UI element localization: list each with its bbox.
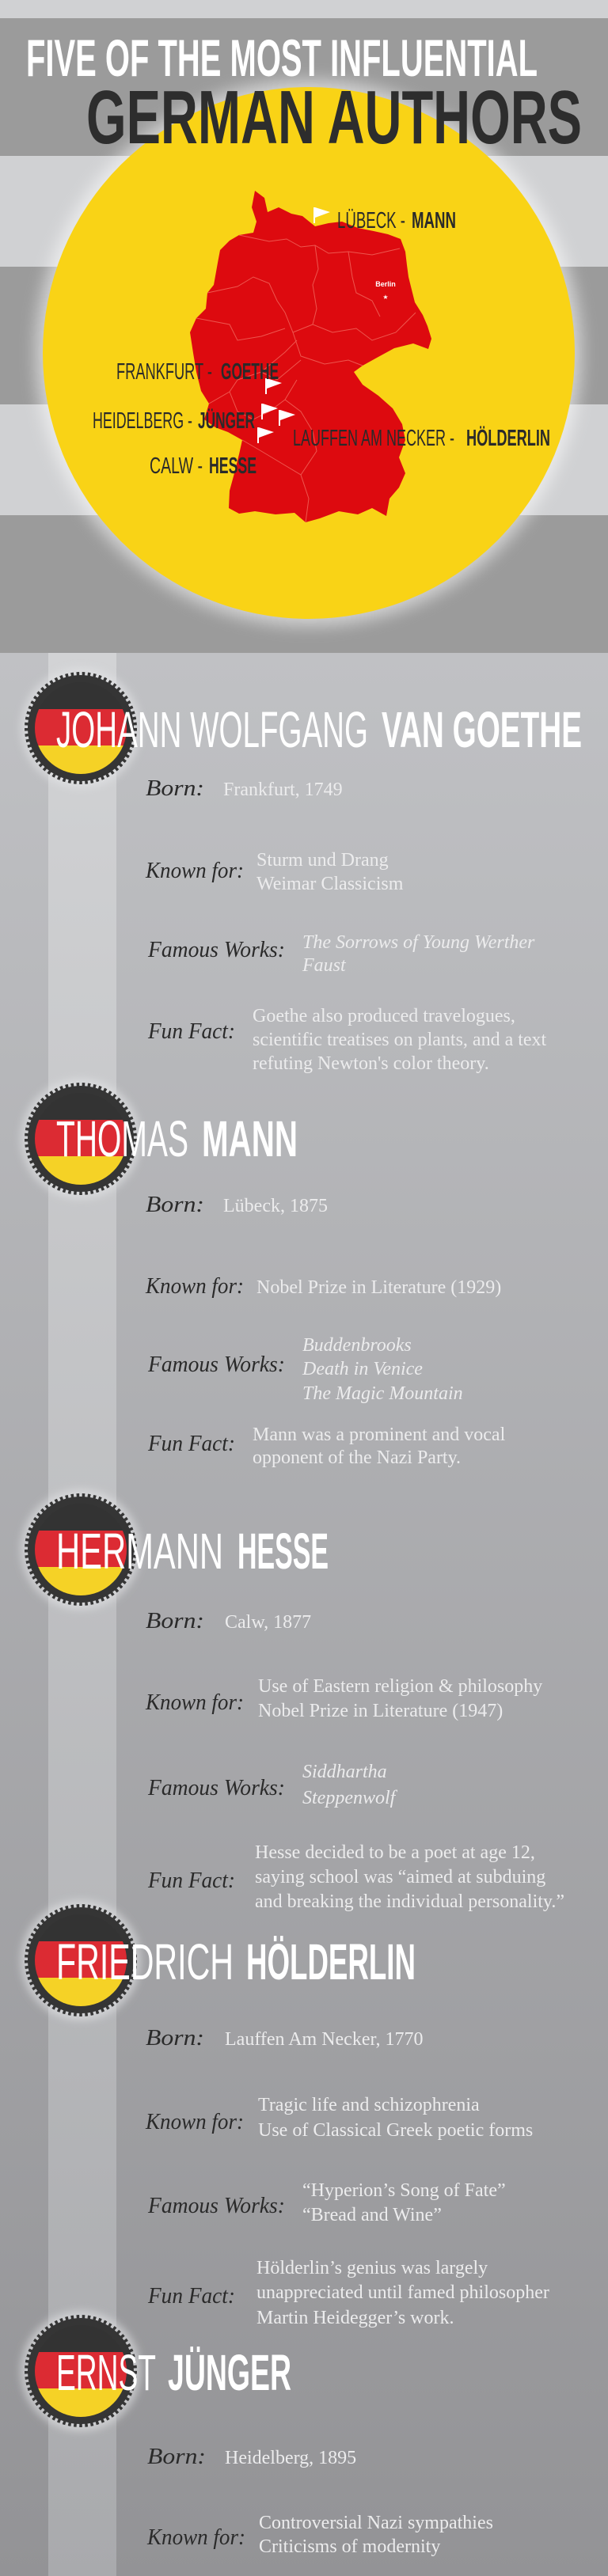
details: Goethe: Weimar Classicism: [256, 874, 404, 894]
name: Hesse: HESSE: [238, 1523, 329, 1580]
details: Hesse: Steppenwolf: [302, 1788, 398, 1808]
panel: Hölderlin: [21, 1900, 549, 2328]
map labels: MANN: [412, 208, 456, 233]
details: Hölderlin: [145, 2026, 549, 2328]
details: Hesse: Known for:: [145, 1690, 244, 1715]
details: Goethe: scientific treatises on plants, and a text: [253, 1030, 547, 1050]
details: Hölderlin: Lauffen Am Necker, 1770: [225, 2029, 424, 2050]
details: Hesse: Fun Fact:: [147, 1868, 235, 1893]
name: Jünger: JÜNGER: [168, 2344, 291, 2401]
map labels: HEIDELBERG -: [93, 408, 192, 434]
map labels: HÖLDERLIN: [466, 425, 550, 451]
details: Jünger: Known for:: [146, 2525, 245, 2550]
details: Hölderlin: Born:: [146, 2026, 204, 2051]
details: Goethe: Faust: [302, 955, 347, 976]
name: Goethe: JOHANN WOLFGANG: [56, 701, 368, 758]
details: Mann: opponent of the Nazi Party.: [253, 1447, 461, 1468]
details: Hesse: Nobel Prize in Literature (1947): [258, 1701, 503, 1721]
details: Mann: Known for:: [145, 1274, 244, 1299]
details: Hölderlin: Famous Works:: [147, 2194, 285, 2218]
details: Hölderlin: Martin Heidegger’s work.: [256, 2308, 454, 2328]
badge: Goethe: [21, 668, 141, 788]
map labels: JÜNGER: [198, 408, 255, 434]
details: Mann: [145, 1193, 506, 1468]
name: Jünger: ERNST: [56, 2344, 156, 2401]
map labels: FRANKFURT -: [116, 359, 212, 385]
name: Hesse: HERMANN: [56, 1523, 223, 1580]
details: Jünger: Criticisms of modernity: [259, 2536, 440, 2557]
details: Goethe: Famous Works:: [147, 938, 285, 962]
Berlin marker: ★: [382, 294, 389, 301]
details: Mann: Fun Fact:: [147, 1432, 235, 1456]
details: Hölderlin: unappreciated until famed philosopher: [256, 2282, 549, 2303]
details: Mann: The Magic Mountain: [302, 1383, 463, 1404]
Berlin marker: Berlin: [375, 280, 396, 288]
details: Goethe: Sturm und Drang: [256, 850, 389, 871]
map labels: HESSE: [209, 453, 256, 479]
details: Goethe: The Sorrows of Young Werther: [302, 932, 535, 953]
details: Hesse: Calw, 1877: [225, 1612, 311, 1633]
details: Hölderlin: “Hyperion’s Song of Fate”: [302, 2180, 506, 2201]
details: Hölderlin: Use of Classical Greek poetic forms: [258, 2120, 533, 2141]
map labels: LÜBECK -: [337, 208, 405, 233]
name: Hölderlin: FRIEDRICH: [56, 1933, 234, 1990]
map labels: GOETHE: [221, 359, 279, 385]
details: Goethe: [145, 776, 547, 1074]
details: Jünger: Born:: [147, 2445, 206, 2469]
details: Goethe: Frankfurt, 1749: [223, 780, 343, 800]
details: Goethe: Known for:: [145, 859, 244, 883]
details: Hesse: Famous Works:: [147, 1776, 285, 1800]
map of Germany: [190, 191, 431, 522]
details: Goethe: Born:: [146, 776, 204, 801]
details: Hesse: Born:: [146, 1609, 204, 1633]
details: Hesse: Hesse decided to be a poet at age 12,: [255, 1842, 535, 1863]
name: Hölderlin: HÖLDERLIN: [246, 1933, 416, 1990]
Berlin marker: [375, 280, 396, 301]
details: Goethe: Goethe also produced travelogues,: [253, 1006, 515, 1026]
details: Mann: Nobel Prize in Literature (1929): [256, 1277, 501, 1298]
details: Mann: Buddenbrooks: [302, 1335, 412, 1356]
badge: Hölderlin: [21, 1900, 141, 2020]
title: [26, 28, 582, 160]
badge: Mann: [21, 1079, 141, 1199]
yellow circle: [36, 80, 582, 626]
details: Hesse: Siddhartha: [302, 1762, 387, 1782]
badge: Hesse: [21, 1489, 141, 1610]
panel: Mann: [21, 1079, 506, 1468]
details: Goethe: Fun Fact:: [147, 1019, 235, 1044]
map labels: [93, 208, 550, 479]
details: Hölderlin: Known for:: [145, 2110, 244, 2134]
details: Hesse: Use of Eastern religion & philosophy: [258, 1676, 542, 1697]
name: Mann: MANN: [202, 1110, 298, 1167]
details: Hölderlin: Fun Fact:: [147, 2284, 235, 2309]
details: Mann: Death in Venice: [302, 1359, 423, 1379]
background: header bands: [0, 0, 608, 653]
details: Hölderlin: Tragic life and schizophrenia: [258, 2095, 480, 2115]
panel: Goethe: [21, 668, 582, 1074]
details: Jünger: Heidelberg, 1895: [225, 2448, 356, 2468]
flag markers: [257, 207, 330, 443]
details: Mann: Mann was a prominent and vocal: [253, 1425, 506, 1445]
details: Hölderlin: Hölderlin’s genius was largely: [256, 2258, 488, 2278]
details: Mann: Famous Works:: [147, 1352, 285, 1377]
panel: Jünger: [21, 2311, 493, 2557]
badge: Jünger: [21, 2311, 141, 2431]
details: Hesse: [145, 1609, 564, 1912]
background: author section: [0, 653, 608, 2576]
details: Hölderlin: “Bread and Wine”: [302, 2205, 442, 2225]
details: Mann: Lübeck, 1875: [223, 1196, 328, 1216]
details: Mann: Born:: [146, 1193, 204, 1217]
details: Jünger: [146, 2445, 493, 2557]
details: Goethe: refuting Newton's color theory.: [253, 1053, 489, 1074]
map labels: CALW -: [150, 453, 203, 479]
name: Mann: THOMAS: [56, 1110, 188, 1167]
details: Hesse: and breaking the individual personality.”: [255, 1891, 564, 1912]
details: Jünger: Controversial Nazi sympathies: [259, 2513, 493, 2533]
map labels: LAUFFEN AM NECKER -: [293, 426, 454, 451]
panel: Hesse: [21, 1489, 564, 1912]
details: Hesse: saying school was “aimed at subduing: [255, 1867, 545, 1887]
